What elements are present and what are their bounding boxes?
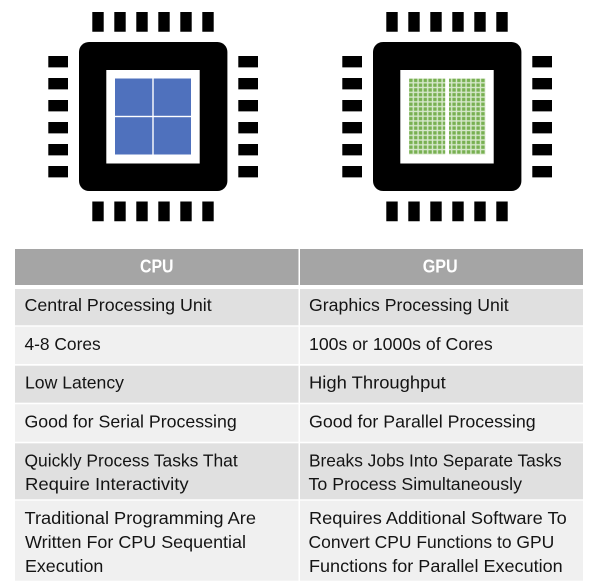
- row: latency and throughput: Low Latency: [25, 372, 124, 392]
- GPU left pins: [342, 56, 362, 177]
- row: programming: Written For CPU Sequential: [25, 532, 246, 552]
- comparison table: [15, 249, 583, 581]
- row: programming: Convert CPU Functions to GPU: [308, 532, 554, 552]
- row: name: Central Processing Unit: [24, 295, 212, 315]
- GPU core grid: [409, 78, 485, 154]
- CPU chip body: [79, 42, 227, 191]
- row: programming: Functions for Parallel Execution: [309, 556, 563, 576]
- row: latency and throughput: High Throughput: [309, 372, 446, 392]
- CPU right pins: [238, 56, 258, 177]
- row: cores: [15, 327, 583, 364]
- row: programming: Execution: [25, 556, 103, 576]
- row: tasks: Quickly Process Tasks That: [24, 451, 238, 471]
- row: processing type: [15, 404, 583, 442]
- icon: CPU chip: [48, 12, 258, 221]
- row: tasks: Require Interactivity: [25, 474, 189, 494]
- row: cores: 100s or 1000s of Cores: [309, 334, 493, 354]
- row: latency and throughput: [15, 366, 583, 403]
- table header row: [15, 249, 583, 285]
- row: processing type: Good for Parallel Processing: [309, 412, 536, 432]
- CPU four cores: [115, 78, 191, 154]
- row: programming: Requires Additional Software To: [309, 508, 567, 528]
- GPU chip body: [373, 42, 521, 191]
- table header row: CPU: [140, 256, 174, 276]
- icon: GPU chip: [342, 12, 552, 221]
- row: tasks: Breaks Jobs Into Separate Tasks: [309, 451, 562, 471]
- row: tasks: [15, 443, 583, 499]
- GPU bottom pins: [386, 202, 508, 221]
- CPU left pins: [48, 56, 68, 177]
- row: programming: Traditional Programming Are: [24, 508, 256, 528]
- row: cores: 4-8 Cores: [24, 334, 101, 354]
- CPU die: [106, 70, 200, 164]
- row: tasks: To Process Simultaneously: [308, 474, 522, 494]
- row: programming: [15, 501, 583, 581]
- row: name: Graphics Processing Unit: [309, 295, 509, 315]
- row: processing type: Good for Serial Processing: [24, 412, 237, 432]
- GPU right pins: [532, 56, 552, 177]
- GPU top pins: [386, 12, 508, 32]
- row: name: [15, 289, 583, 325]
- GPU die: [400, 70, 494, 164]
- CPU top pins: [92, 12, 214, 32]
- table header row: GPU: [423, 256, 458, 276]
- CPU bottom pins: [92, 202, 214, 221]
